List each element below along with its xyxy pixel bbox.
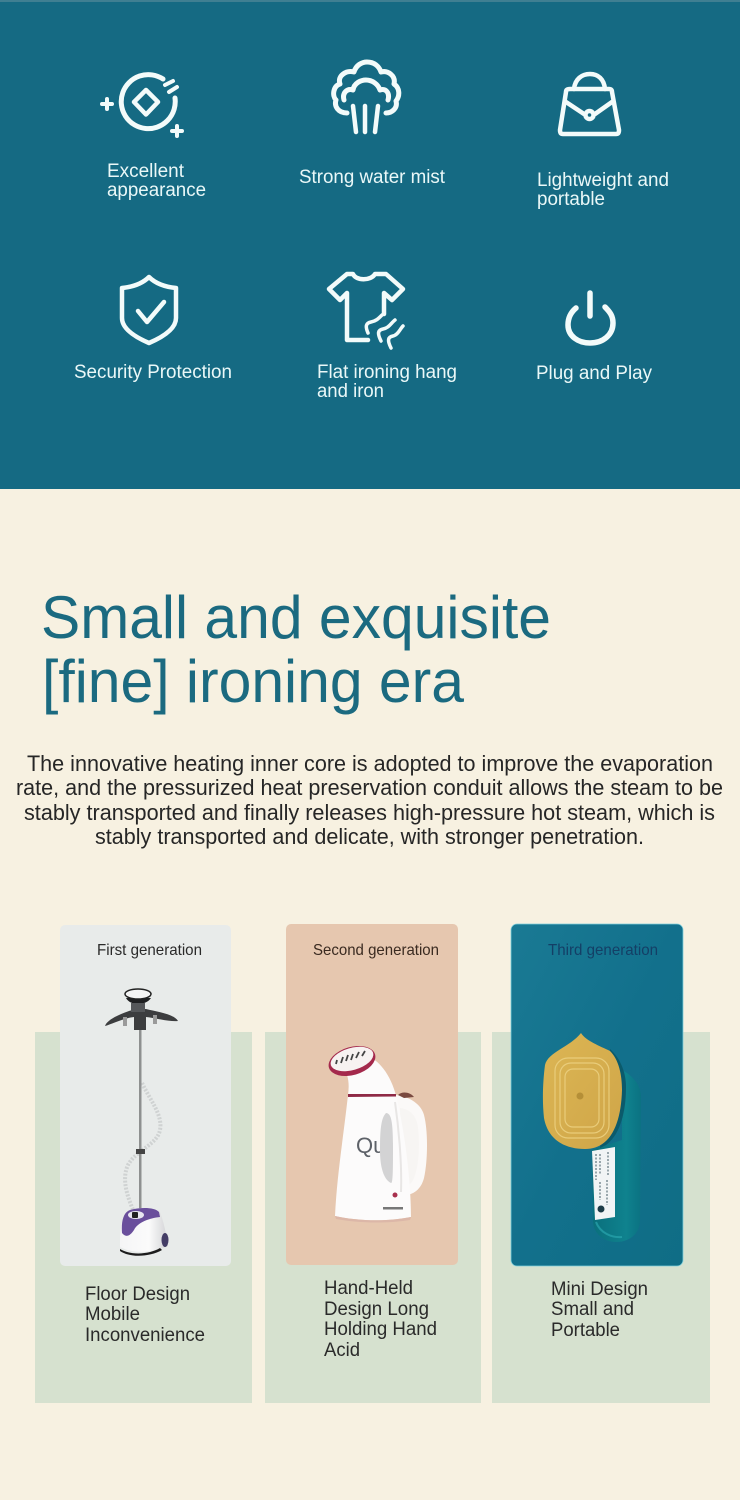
- label: plug and play: Plug and Play: [536, 363, 652, 384]
- label: flat ironing hang and iron: Flat ironing hang: [317, 362, 457, 383]
- icon: diamond ring: [102, 75, 182, 136]
- card title: First generation: [97, 942, 202, 959]
- green backing panel: [492, 1032, 710, 1403]
- card caption: Design Long: [324, 1299, 429, 1320]
- card caption: Small and: [551, 1299, 634, 1320]
- feature: flat ironing hang and iron: [317, 274, 457, 402]
- feature: plug and play: [536, 293, 652, 384]
- text block: description: rate, and the pressurized heat preservation conduit allows the steam to be: [16, 775, 723, 800]
- panel: second generation: [265, 924, 481, 1403]
- card: third generation: [511, 924, 683, 1266]
- feature: strong water mist: [299, 62, 446, 188]
- product: floor steamer: [105, 989, 178, 1256]
- product: mini iron: [543, 1033, 641, 1242]
- label: security protection: Security Protection: [74, 362, 232, 383]
- heading: [fine] ironing era: [42, 648, 465, 715]
- panel: third generation: [492, 924, 710, 1403]
- panel: feature band: [0, 0, 740, 489]
- text block: description: The innovative heating inner core is adopted to improve the evaporation: [27, 751, 713, 776]
- card caption: Portable: [551, 1320, 620, 1341]
- panel: first generation: [35, 925, 252, 1403]
- label: excellent appearance: appearance: [107, 180, 206, 201]
- green backing panel: [35, 1032, 252, 1403]
- feature: security protection: [74, 277, 232, 383]
- card caption: Mini Design: [551, 1279, 648, 1300]
- icon: mist cloud: [334, 62, 399, 132]
- card caption: Inconvenience: [85, 1325, 205, 1346]
- icon: t-shirt with steam: [329, 274, 403, 348]
- product: handheld steamer: [325, 1041, 427, 1223]
- icon: power button: [568, 293, 613, 343]
- text block: description: stably transported and delicate, with stronger penetration.: [95, 824, 644, 849]
- card: second generation: [286, 924, 458, 1265]
- card caption: Mobile: [85, 1304, 140, 1325]
- panel: cream background: [0, 489, 740, 1500]
- label: strong water mist: Strong water mist: [299, 167, 446, 188]
- green backing panel: [265, 1032, 481, 1403]
- product: handheld steamer: Qu: [356, 1133, 385, 1158]
- feature: lightweight and portable: [537, 74, 669, 210]
- card title: Second generation: [313, 942, 439, 959]
- label: excellent appearance: Excellent: [107, 161, 185, 182]
- card caption: Holding Hand: [324, 1319, 437, 1340]
- card caption: Floor Design: [85, 1284, 190, 1305]
- icon: handbag: [560, 74, 619, 134]
- label: flat ironing hang and iron: and iron: [317, 381, 384, 402]
- label: lightweight and portable: portable: [537, 189, 605, 210]
- card: first generation: [60, 925, 231, 1266]
- text block: description: stably transported and finally releases high-pressure hot steam, which is: [24, 800, 715, 825]
- feature: excellent appearance: [102, 75, 206, 201]
- icon: shield check: [122, 277, 176, 343]
- card caption: Hand-Held: [324, 1278, 413, 1299]
- label: lightweight and portable: Lightweight and: [537, 170, 669, 191]
- heading: Small and exquisite: [41, 584, 551, 651]
- card caption: Acid: [324, 1340, 360, 1361]
- card title: Third generation: [548, 942, 658, 959]
